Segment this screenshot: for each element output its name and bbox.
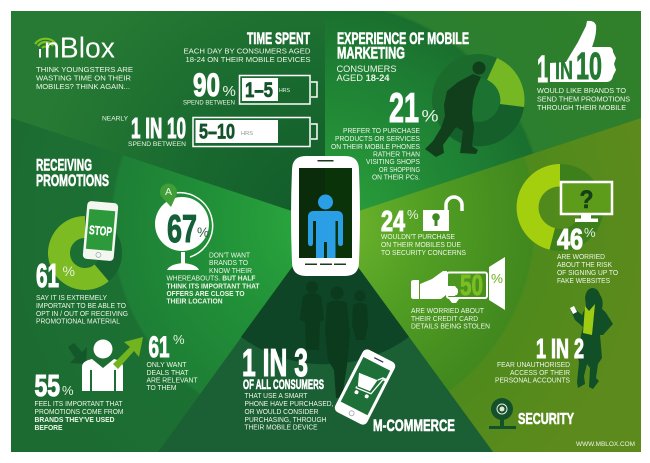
heading and stat: 1 in 3: OR WOULD CONSIDER	[244, 407, 318, 416]
heading: receiving promotions: PROMOTIONS	[36, 171, 109, 190]
stat: nearly 1 in 10: NEARLY	[102, 116, 129, 123]
icon: globe 67 percent	[155, 184, 213, 270]
heading: experience of mobile marketing: AGED 18-24	[336, 73, 390, 83]
stat: 46 percent: %	[584, 225, 596, 240]
stat: 24 percent with padlock: TO SECURITY CONCERNS	[381, 248, 466, 257]
heading: receiving promotions: RECEIVING	[36, 156, 92, 174]
donut: 46 percent with monitor	[517, 164, 612, 250]
intro text: THINK YOUNGSTERS ARE	[36, 65, 133, 74]
stat: 61 percent relevant: ARE RELEVANT	[146, 376, 198, 384]
logo: mBlox: nBlox	[44, 32, 115, 64]
donut: 61 percent	[48, 216, 111, 290]
stat: 90 percent: %	[222, 83, 236, 100]
stat: 61 percent relevant: %	[173, 332, 185, 347]
website url: WWW.MBLOX.COM	[576, 441, 635, 448]
icon: thumbs up 1 in 10: 10	[576, 46, 602, 88]
icon: cart	[351, 369, 386, 402]
icon: hand with credit card 50 percent: %	[491, 271, 503, 286]
heading: experience of mobile marketing: CONSUMERS	[336, 64, 396, 74]
icon: phone with stop	[83, 201, 118, 261]
stat: 61 percent opt in: 61	[36, 257, 59, 294]
stat: 21 percent: PRODUCTS OR SERVICES	[335, 134, 420, 143]
stat: 55 percent: BRANDS THEY'VE USED	[34, 415, 115, 424]
stat: 55 percent: %	[62, 383, 74, 398]
heading: security: SECURITY	[518, 411, 574, 428]
stat: 61 percent opt in: PROMOTIONAL MATERIAL	[36, 316, 120, 326]
stat: 55 percent: PROMOTIONS COME FROM	[34, 407, 124, 416]
icon: central phone	[291, 156, 360, 276]
stat: 46 percent: FAKE WEBSITES	[557, 276, 610, 285]
text: location: THINK ITS IMPORTANT THAT	[166, 282, 260, 290]
heading: experience of mobile marketing: EXPERIENCE OF MOBILE	[337, 29, 469, 48]
intro text	[36, 65, 133, 91]
stat: 61 percent relevant: ONLY WANT	[146, 360, 187, 369]
silhouette: skater	[425, 62, 486, 157]
icon: thumbs up 1 in 10	[537, 21, 630, 112]
stat: 1 in 2	[495, 333, 584, 384]
stat: nearly 1 in 10	[102, 113, 186, 148]
heading: experience of mobile marketing	[336, 29, 469, 83]
stat: 24 percent with padlock	[381, 197, 466, 257]
stat: 21 percent: %	[422, 107, 438, 126]
stat: 24 percent with padlock: 24	[381, 206, 405, 238]
stat: 61 percent relevant: 61	[148, 331, 170, 364]
icon: phone with stop: STOP	[88, 223, 113, 239]
icon: hand with credit card 50 percent	[411, 257, 505, 330]
stat: 21 percent: 21	[389, 84, 419, 131]
icon: thumbs up 1 in 10: SEND THEM PROMOTIONS	[537, 94, 630, 104]
stat: 61 percent relevant: TO THEM	[146, 383, 176, 392]
heading: experience of mobile marketing: MARKETING	[337, 44, 405, 62]
icon: blue person	[308, 194, 343, 258]
stat: 24 percent with padlock: ON THEIR MOBILES DUE	[381, 240, 461, 249]
stat: 1 in 2: PERSONAL ACCOUNTS	[495, 376, 570, 384]
stat: 21 percent: ON THEIR PCs.	[372, 172, 420, 182]
battery: 1-5 hours: HRS	[279, 88, 290, 94]
heading and stat: 1 in 3: 1 IN 3	[242, 342, 308, 385]
stat: 61 percent opt in: %	[62, 263, 75, 279]
stat: nearly 1 in 10: 1 IN 10	[131, 113, 186, 145]
heading: time spent: TIME SPENT	[247, 29, 310, 48]
battery: 5-10 hours: HRS	[241, 131, 253, 137]
icon: hand with credit card 50 percent: DETAILS BEING STOLEN	[411, 322, 490, 330]
stat: 61 percent opt in	[36, 257, 128, 326]
stat: 46 percent	[557, 224, 618, 285]
icon: thumbs up 1 in 10: WOULD LIKE BRANDS TO	[537, 86, 626, 95]
stat: 46 percent: OF SIGNING UP TO	[557, 268, 618, 277]
stat: 90 percent	[183, 67, 236, 106]
stat: 90 percent: 90	[193, 67, 220, 103]
heading and stat: 1 in 3: OF ALL CONSUMERS	[243, 376, 324, 392]
stat: 61 percent relevant	[146, 331, 198, 392]
icon: hand with credit card 50 percent: ARE WORRIED ABOUT	[411, 306, 484, 315]
stat: 55 percent	[34, 368, 124, 432]
battery: 5-10 hours	[193, 118, 317, 146]
icon: globe 67 percent: 67	[167, 208, 197, 251]
stat: 21 percent	[331, 84, 438, 182]
stat: 55 percent: BEFORE	[34, 423, 63, 432]
icon: globe 67 percent: A	[165, 187, 172, 198]
stat: 21 percent: OR SHOPPING	[379, 165, 420, 174]
battery: 1-5 hours: 1–5	[245, 79, 273, 102]
stat: 46 percent: ARE WORRIED	[557, 252, 605, 261]
stat: 21 percent: RATHER THAN	[373, 150, 420, 158]
stat: 61 percent relevant: DEALS THAT	[146, 368, 189, 377]
heading and stat: 1 in 3: THAT USE A SMART	[244, 391, 308, 400]
stat: nearly 1 in 10: SPEND BETWEEN	[128, 141, 186, 148]
stat: 61 percent opt in: OPT IN / OUT OF RECEIVING	[36, 309, 128, 318]
battery: 5-10 hours: 5–10	[199, 120, 235, 144]
text: location: WHEREABOUTS. BUT HALF	[166, 274, 256, 282]
stat: 55 percent: FEEL ITS IMPORTANT THAT	[34, 399, 123, 408]
stat: 21 percent: PREFER TO PURCHASE	[343, 126, 420, 135]
stat: 1 in 2: FEAR UNAUTHORISED	[497, 360, 570, 369]
icon: hand with credit card 50 percent: THEIR CREDIT CARD	[411, 314, 478, 323]
text: location	[166, 251, 260, 306]
icon: thumbs up 1 in 10: IN	[555, 55, 573, 85]
icon: thumbs up 1 in 10: THROUGH THEIR MOBILE	[537, 103, 626, 112]
icon: globe 67 percent: %	[197, 224, 209, 240]
text: location: KNOW THEIR	[209, 266, 252, 275]
stat: 90 percent: SPEND BETWEEN	[183, 100, 235, 106]
chart: ring with 21 percent slice	[432, 54, 525, 146]
stat: 24 percent with padlock: %	[407, 207, 419, 222]
stat: 61 percent opt in: SAY IT IS EXTREMELY	[36, 293, 107, 302]
intro text: WASTING TIME ON THEIR	[36, 74, 131, 82]
stat: 1 in 2: 1 IN 2	[536, 333, 584, 364]
stat: 21 percent: VISITING SHOPS	[366, 157, 420, 166]
icon: thumbs up 1 in 10: 1	[537, 49, 548, 91]
heading and stat: 1 in 3	[242, 342, 334, 432]
icon: shopping phone	[333, 348, 397, 426]
icon: hand with credit card 50 percent: 50	[460, 270, 483, 302]
icon: webcam	[489, 398, 516, 429]
heading: receiving promotions	[36, 156, 109, 190]
silhouettes: crowd	[300, 281, 368, 398]
text: location: THEIR LOCATION	[166, 296, 222, 306]
stat: 24 percent with padlock: WOULDN'T PURCHASE	[381, 232, 455, 241]
intro text: MOBILES? THINK AGAIN...	[36, 82, 130, 91]
heading and stat: 1 in 3: THEIR MOBILE DEVICE	[244, 422, 318, 432]
heading: time spent: EACH DAY BY CONSUMERS AGED	[184, 46, 310, 56]
text: location: BRANDS TO	[209, 258, 248, 267]
stat: 46 percent: ABOUT THE RISK	[557, 260, 612, 269]
heading and stat: 1 in 3: PURCHASING, THROUGH	[244, 415, 326, 424]
heading: time spent	[184, 29, 311, 64]
heading: m-commerce: M-COMMERCE	[373, 416, 455, 435]
silhouette: woman on phone	[570, 288, 613, 389]
stat: 61 percent opt in: IMPORTANT TO BE ABLE TO	[36, 301, 126, 310]
icon: person with arrows	[68, 337, 143, 391]
heading: time spent: 18-24 ON THEIR MOBILE DEVICES	[186, 55, 311, 64]
heading and stat: 1 in 3: PHONE HAVE PURCHASED,	[244, 399, 334, 408]
stat: 1 in 2: ACCESS OF THEIR	[510, 368, 570, 377]
text: location: OFFERS ARE CLOSE TO	[166, 289, 245, 298]
stat: 46 percent: 46	[557, 224, 583, 256]
stat: 55 percent: 55	[34, 368, 60, 403]
stat: 21 percent: ON THEIR MOBILE PHONES	[331, 142, 420, 151]
icon: monitor: ?	[580, 186, 594, 214]
battery: 1-5 hours	[240, 76, 317, 104]
text: location: DON'T WANT	[209, 251, 250, 260]
